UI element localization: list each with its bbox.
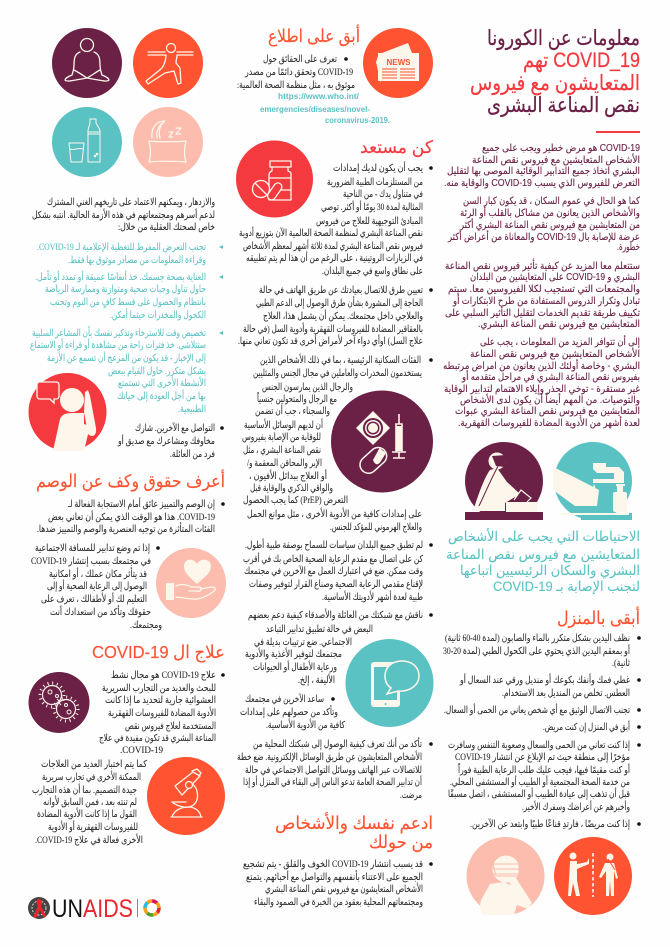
list: stay informed xyxy=(237,54,390,125)
list: be prepared: التعرض (PrEP) كما يجب الحصول xyxy=(243,495,348,506)
text block: introduction: البشري - وخاصة أولئك الذين يعانون من امراض مرتبطه xyxy=(443,359,640,372)
title: معلومات عن الكورونا xyxy=(487,27,640,50)
list: treatment: للبحث والعديد من التجارب السريرية xyxy=(102,683,216,694)
icon: person talking xyxy=(28,373,106,451)
text block: introduction: والمجتمعات التي تستجيب لكلا الفيروسين معا. سيتم xyxy=(448,284,640,295)
list: treatment: علاج COVID-19 هو مجال نشط xyxy=(111,670,216,681)
list: treatment: جيدة التصميم. بما أن هذه التجارب xyxy=(32,783,137,796)
icon: microscope xyxy=(147,757,225,835)
text block: introduction: ستتعلم معا المزيد عن كيفية تأثير فيروس نقص المناعة xyxy=(445,258,640,272)
list: stay home: أو بمعقم اليدين الذي يحتوي على الكحول الطبي (لمدة 20-30 xyxy=(443,644,630,657)
text block: resilience: خاص لصحتك العقلية من خلال: xyxy=(118,222,215,233)
list: be prepared: تعيين طرق للاتصال بعيادتك عن طريق الهاتف في حالة xyxy=(259,285,423,296)
subheading: precautions: المتعايشين مع فيروس نقص المناعة xyxy=(446,547,640,563)
icon: meditation xyxy=(52,28,122,98)
list: be prepared: والواقي الذكري والوقاية قبل xyxy=(250,483,333,494)
subheading: precautions xyxy=(446,528,640,595)
list: treatment: كما يتم اختبار العديد من العلاجات xyxy=(41,759,147,770)
title: نقص المناعة البشرى xyxy=(487,94,640,117)
list: be prepared: والرجال الذين يمارسون الجنس xyxy=(262,382,353,393)
text block: introduction: تبادل وتكرار الدروس المستفادة من طرح الابتكارات أو xyxy=(452,294,640,307)
list: be prepared: في متناول يدك - من الناحية xyxy=(343,189,423,200)
list: know your rights: حقوقك وتأكد من استعدادك أنت xyxy=(50,605,151,618)
list: be prepared: علاج السل) اوأي دواء آخر لأمراض أخرى قد تكون تعاني منها. xyxy=(238,334,423,347)
list: be prepared: لإقناع مقدمي الرعاية الصحية وصناع القرار لتوفير وصفات xyxy=(249,579,423,590)
icon: phone with speech bubble xyxy=(346,639,434,727)
list: be prepared: للوقاية من الإصابة بفيروس xyxy=(242,432,321,443)
list: mental health tips: إلى الإخبار - قد يكون من المزعج أن تسمع عن الأزمة xyxy=(47,351,206,364)
list: be prepared: والعلاجي داخل مجتمعك. يمكن أن يشمل هذا، العلاج xyxy=(263,309,423,322)
text block: introduction: COVID-19 هو مرض خطير ويجب على جميع xyxy=(482,143,640,154)
heading: support yourself: من حولك xyxy=(369,832,433,852)
list: be prepared: ساعد الآخرين في مجتمعك xyxy=(245,693,324,705)
list: be prepared: طبية لعدة أشهر لأدويتك الأساسية. xyxy=(322,590,423,603)
list: mental health tips: بانتظام والحصول على قسط كافٍ من النوم وتجنب xyxy=(50,297,206,309)
list: mental health tips xyxy=(30,242,223,415)
title: المتعايشون مع فيروس xyxy=(470,72,640,95)
list: mental health tips: وقراءة المعلومات من مصادر موثوق بها فقط. xyxy=(68,255,206,266)
list: be prepared: مرضت. xyxy=(400,790,422,801)
list: be prepared: وقت ممكن. ضع في اعتبارك العمل مع الآخرين في مجتمعك xyxy=(244,565,423,577)
text block: introduction: الأشخاص المتعايشين مع فيروس نقص المناعة xyxy=(472,153,640,166)
heading: support yourself: ادعم نفسك والأشخاص xyxy=(275,812,433,834)
list: know your rights: COVID-19. هذا هو الوقت الذي يمكن أن تعاني بعض xyxy=(48,510,215,523)
list: know your rights: إذا تم وضع تدابير للمسافة الاجتماعية xyxy=(35,543,150,554)
icon: physical distancing xyxy=(554,837,632,915)
list: stay home: وأخبرهم عن أعراضك وسفرك الأخير. xyxy=(522,800,630,813)
text block: support yourself: الأشخاص المتعايشون مع فيروس نقص المناعة البشري xyxy=(265,882,423,895)
list: know your rights: في مجتمعك بسبب إنتشار COVID-19 xyxy=(31,556,151,567)
text block: introduction: إلى أن تتوافر المزيد من المعلومات ، يجب على xyxy=(480,335,640,348)
icon: person sneezing into tissue xyxy=(465,442,543,520)
text block: resilience: لدعم أسرهم ومجتمعاتهم في هذه الأزمة الحالية. انتبه بشكل xyxy=(32,208,215,221)
icon: pill bottle and capsules xyxy=(236,140,313,218)
text block: introduction: والتوصيات. من المهم أيضاً أن يكون لدى الأشخاص xyxy=(460,392,640,406)
logo: UNAIDS: UNAIDS xyxy=(52,895,133,923)
text block: introduction: من المتعايشين مع فيروس نقص المناعة البشري أكثر xyxy=(459,218,640,231)
text block: support yourself: الجميع على الاعتناء بأنفسهم والتواصل مع أحبائهم. يتمتع xyxy=(246,870,423,883)
list: be prepared: وتأكد من حصولهم على إمدادات xyxy=(240,705,338,718)
subheading: precautions: الاحتياطات التي يجب على الأشخاص xyxy=(448,528,640,545)
heading: treatment: علاج ال COVID-19 xyxy=(92,642,225,663)
icon: heart in hand xyxy=(156,548,226,618)
list: treatment: لم تنته بعد ، فمن السابق لأوانه xyxy=(43,795,137,808)
text block: introduction: عرضة للإصابة بال COVID-19 والمعاناة من أعراض أكثر xyxy=(447,230,640,243)
list: be prepared: بالعقاقير المضادة للفيروسات القهقرية وأدوية السل (في حالة xyxy=(243,322,423,335)
list: be prepared: مع الرجال والمتحولين جنسياً xyxy=(257,392,337,405)
text block: introduction: التعرض للفيروس الذي يسبب COVID-19 والوقاية منه. xyxy=(444,178,640,189)
list: be prepared: يستخدمون المخدرات والعاملين في مجال الجنس والمثليين xyxy=(253,368,422,379)
text block: introduction: المتعايشين مع فيروس نقص المناعة البشري. xyxy=(478,319,640,330)
list: be prepared: المبادئ التوجيهية للعلاج من فيروس xyxy=(316,216,423,227)
list: be prepared: أن لديهم الوسائل الأساسية xyxy=(244,418,323,431)
list: stay informed: https://www.who.int/ xyxy=(278,91,360,101)
list: stay home: مؤخرًا إلى منطقة حيث تم الإبلاغ عن انتشار COVID-19 xyxy=(455,752,630,763)
list: know your rights: قد يتأثر مكان عملك ، أو امكانية xyxy=(49,567,147,580)
list: be prepared: نقص المناعة البشري ، مثل xyxy=(243,445,321,456)
list: stay informed: emergencies/diseases/novel- xyxy=(260,104,370,114)
subheading: precautions: البشري والسكان الرئيسيين اتباعها xyxy=(460,563,640,579)
subheading: precautions: لتجنب الإصابة بـ COVID-19 xyxy=(493,579,640,595)
list: be prepared: المثالية لمدة 30 يومًا أو أكثر. توصي xyxy=(321,200,423,213)
heading: know your rights: أعرف حقوق وكف عن الوصم xyxy=(36,469,225,492)
text block: introduction: تكييف طريقة تقديم الخدمات لتقليل التأثير السلبي على xyxy=(445,305,640,319)
list: be prepared: والسجناء ، جب أن تضمن xyxy=(255,404,330,417)
text block: resilience: والازدهار ، ويمكنهم الاعتماد على تاريخهم الغني المشترك xyxy=(47,197,215,208)
list: be prepared: والعلاج الهرموني للمؤكد للجنس. xyxy=(330,522,422,533)
list: know your rights: التعليم لك أو لأطفالك ، تعرف على xyxy=(41,592,147,605)
list: know your rights: الفئات المتأثرة من توجيه العنصرية والوصم والتمييز ضدها. xyxy=(37,522,215,535)
list: be prepared: البعض في حالة تطبيق تدابير التباعد xyxy=(266,624,373,635)
text block: introduction xyxy=(443,143,640,429)
text block: introduction: المتعايشين مع فيروس نقص المناعة البشري عبوات xyxy=(455,406,640,417)
list: treatment: للفيروسات القهقرية أو الأدوية xyxy=(48,820,138,833)
heading: stay informed: أبق على اطلاع xyxy=(268,24,360,47)
list: mental health tips: تخصيص وقت للاسترخاء وتذكير نفسك بأن المشاعر السلبية xyxy=(32,326,206,339)
icon: condom, syringe and capsule xyxy=(331,390,433,492)
list: stay home: العطس. تخلص من المنديل بعد الاستخدام. xyxy=(502,688,630,699)
list: treatment: العشوائية جارية لتحديد ما إذا كانت xyxy=(105,695,216,706)
icon: yoga pose xyxy=(133,28,203,98)
list: be prepared: الأشخاص المتعايشون عن طريق الوسائل الإلكترونية. ضع خطة xyxy=(237,750,422,763)
list: treatment: الأخرى فعالة في علاج COVID-19. xyxy=(35,833,143,846)
icon: water bottle and glass xyxy=(52,107,122,177)
list: treatment: المناعة البشري قد تكون مفيدة في علاج xyxy=(99,733,216,744)
list: mental health tips: الكحول والمخدرات حيثما أمكن. xyxy=(110,308,206,321)
list: mental health tips: تجنب التعرض المفرط للتغطية الإعلامية لـ COVID-19. xyxy=(37,242,206,253)
list: be prepared: الأليفة ، إلخ. xyxy=(298,673,335,686)
text block: introduction: البشري و COVID-19 على المتعايشين من البلدان xyxy=(470,272,640,283)
list: treatment: COVID-19. xyxy=(120,745,163,756)
list: be prepared: الفئات السكانية الرئيسية ، بما في ذلك الأشخاص الذين xyxy=(260,353,421,366)
list: be prepared: ورعاية الأطفال أو الحيوانات xyxy=(253,660,337,673)
list: stay home xyxy=(443,633,641,830)
list: mental health tips: حاول تناول وجبات صحية ومتوازنة وممارسة الرياضة xyxy=(45,284,206,295)
list: be prepared: ناقش مع شبكتك من العائلة والأصدقاء كيفية دعم بعضهم xyxy=(248,608,423,621)
list: be prepared: من المستلزمات الطبية الضرورية xyxy=(327,177,423,188)
title: COVID_19 تهم xyxy=(523,49,640,73)
list: mental health tips: بها من أجل العودة إلى حياتك xyxy=(117,389,206,402)
heading: support yourself xyxy=(275,812,433,852)
logo: UNAIDS xyxy=(28,895,159,923)
list: treatment: الأدوية المضادة للفيروسات القهقرية xyxy=(108,706,216,719)
list: be prepared: الحاجة إلى المشورة بشأن طرق الوصول إلى الدعم الطبي xyxy=(256,296,423,309)
text block: support yourself xyxy=(243,859,433,908)
list: be prepared: كن على اتصال مع مقدم الرعاية الصحية الخاص بك في أقرب xyxy=(243,552,423,565)
list: connect with others xyxy=(117,422,224,460)
list: connect with others: مخاوفك ومشاعرك مع صديق أو xyxy=(117,434,215,447)
heading: stay home: أبقى بالمنزل xyxy=(557,606,640,628)
list: be prepared: يجب أن يكون لديك إمدادات xyxy=(333,161,423,174)
list: stay informed: موثوق به ، مثل منظمة الصحة العالمية: xyxy=(237,80,355,91)
text block: support yourself: ومجتمعاتهم المحلية بعقود من الخبرة في الصمود والبقاء xyxy=(254,897,423,908)
list: connect with others: التواصل مع الآخرين. شارك xyxy=(135,422,215,434)
text block: introduction: البشري اتخاذ جميع التدابير الوقائية الموصى بها لتقليل xyxy=(447,166,640,177)
icon: pillow and moon xyxy=(133,107,203,177)
icon: virus xyxy=(28,672,90,733)
list: mental health tips: الأنشطة الأخرى التي تستمتع xyxy=(118,376,206,389)
list: stay informed: تعرف على الحقائق حول xyxy=(263,54,337,65)
list: stay home: ثانية). xyxy=(612,658,630,669)
text block: resilience xyxy=(32,197,215,233)
list: stay home: غطي فمك وأنفك بكوعك أو منديل ورقي عند السعال أو xyxy=(459,673,630,686)
icon: newspaper xyxy=(363,28,433,98)
text block: introduction: الأشخاص المتعايشين مع فيروس نقص المناعة xyxy=(470,347,640,360)
list: mental health tips: بشكل متكرر. حاول القيام ببعض xyxy=(108,366,206,377)
list: be prepared: على إمدادات كافية من الأدوية الأخرى ، مثل موانع الحمل xyxy=(247,507,422,520)
icon: person wearing mask xyxy=(466,837,544,915)
list: be prepared: لم تطبق جميع البلدان سياسات للسماح بوصفة طبية أطول. xyxy=(245,538,423,551)
heading: be prepared: كن مستعد xyxy=(360,137,434,157)
list: be prepared: كافية من الأدوية الأساسية. xyxy=(266,718,345,731)
text block: introduction: كما هو الحال في عموم السكان ، قد يكون كبار السن xyxy=(463,196,640,207)
list: treatment: المستخدمة لعلاج فيروس نقص xyxy=(125,721,216,732)
list: stay home: إذا كنت مريضًا ، فارتدِ قناعًا طبيًا وابتعد عن الآخرين. xyxy=(470,818,630,830)
list: be prepared: للاتصالات عبر الهاتف ووسائل التواصل الاجتماعي في حالة xyxy=(245,765,422,776)
list: be prepared: أن تدابير الصحة العامة تدعو الناس إلى البقاء في المنزل أو إذا xyxy=(243,775,422,788)
title xyxy=(470,27,640,117)
list: treatment xyxy=(32,670,225,846)
text block: introduction: غير مستقرة - توخي الحذر وإيلاء الاهتمام لتدابير الوقاية xyxy=(444,384,640,395)
text block: introduction: بفيروس نقص المناعة البشري في مراحل متقدمه أو xyxy=(461,370,640,383)
list: be prepared: في الزيارات الروتينية ، على الرغم من أن هذا لم يتم تطبيقه xyxy=(246,251,423,264)
text block: introduction: لعدة أشهر من الأدوية المضادة للفيروسات القهقرية. xyxy=(458,416,640,429)
list: be prepared: فيروس نقص المناعة البشري لمدة ثلاثة أشهر لمعظم الأشخاص xyxy=(243,239,423,252)
list: be prepared: أو العلاج ببدائل الأفيون ، xyxy=(249,469,327,482)
list: stay home: أبق في المنزل إن كنت مريض. xyxy=(543,720,630,733)
icon: washing hands xyxy=(553,442,632,520)
list: treatment: القول ما إذا كانت الأدوية المضادة xyxy=(37,807,137,820)
list: mental health tips: العناية بصحة جسمك. خذ أنفاسًا عميقة أو تمدد أو تأمل. xyxy=(35,270,206,283)
list: be prepared: الاجتماعي. ضع ترتيبات بديلة في xyxy=(254,637,352,648)
list: know your rights: إن الوصم والتمييز عائق أمام الاستجابة الفعالة لـ xyxy=(67,497,215,510)
list: know your rights: الوصول إلى الرعاية الصحية أو إلى xyxy=(47,579,147,592)
text block: support yourself: قد يسبب انتشار COVID-19 الخوف والقلق - يتم تشجيع xyxy=(243,859,423,870)
list: be prepared xyxy=(237,161,433,801)
list: stay informed: coronavirus-2019. xyxy=(325,115,390,125)
text block: introduction: والأشخاص الذين يعانون من مشاكل بالقلب أو الرئة xyxy=(460,206,640,219)
text block: introduction: خطورة. xyxy=(617,242,640,253)
list: be prepared: الإبر والمحاقن المعقمة و/ xyxy=(247,458,322,469)
list: stay home: أو كنت مقيمًا فيها، فيجب عليك طلب الرعاية الطبية فوراً xyxy=(458,763,630,776)
list: know your rights xyxy=(31,497,225,631)
list: stay home: نظف اليدين بشكل متكرر بالماء والصابون (لمدة 40-60 ثانية) xyxy=(445,633,630,644)
list: mental health tips: ستتلاشى. خذ فترات راحة من مشاهدة أو قراءة أو الاستماع xyxy=(30,338,206,351)
list: connect with others: فرد من العائلة. xyxy=(170,449,215,460)
list: be prepared: تأكد من أنك تعرف كيفية الوصول إلى شبكتك المحلية من xyxy=(253,737,422,750)
icon: newspaper: NEWS xyxy=(386,58,411,67)
list: know your rights: ومجتمعك. xyxy=(130,620,162,631)
list: be prepared: على نطاق واسع في جميع البلدان. xyxy=(322,266,423,277)
list: be prepared: نقص المناعة البشري لمنظمة الصحة العالمية الآن بتوزيع أدوية xyxy=(239,226,423,239)
list: be prepared: مجتمعك لتوفير الأغذية والأدوية xyxy=(245,647,342,660)
list: mental health tips: الطبيعية. xyxy=(178,404,206,415)
list: treatment: الممكنة الأخرى في تجارب سريرية xyxy=(42,770,141,783)
list: stay informed: COVID-19 وتحقق دائمًا من مصدر xyxy=(244,67,353,78)
